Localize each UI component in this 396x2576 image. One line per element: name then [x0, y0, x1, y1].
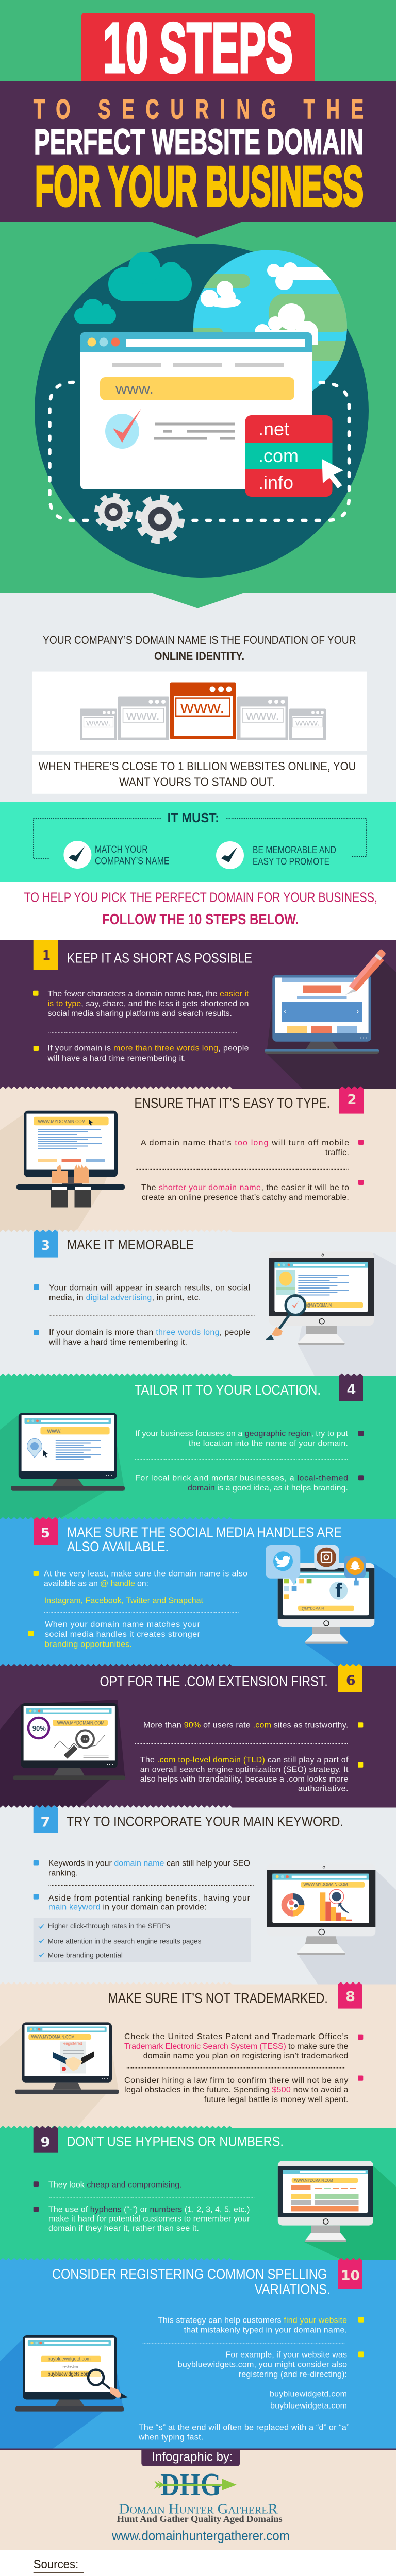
icon: twitter — [266, 1545, 300, 1586]
bullet 2 text: branding opportunities. — [45, 1640, 132, 1649]
call to action — [0, 882, 396, 940]
illustration: desktop with web page — [278, 2161, 373, 2242]
step number 3: 3 — [41, 1238, 50, 1253]
step number 4 — [339, 1374, 363, 1401]
hero pointer — [153, 593, 243, 608]
illustration: monitor with typing hands: WWW.MYDOMAIN.COM — [38, 1118, 86, 1125]
heading: ALSO AVAILABLE. — [67, 1539, 169, 1554]
illustration: desktop with analytics: WWW.MYDOMAIN.COM — [303, 1882, 348, 1888]
requirement: match name: MATCH YOUR — [95, 844, 147, 855]
panel: step 9 — [0, 2126, 396, 2261]
bullet 1 text — [34, 1284, 250, 1302]
bullet 2 text — [34, 1894, 251, 1912]
bullet 1 text: Instagram, Facebook, Twitter and Snapchat — [44, 1597, 204, 1605]
illustration: monitor with seo chart: WWW.MYDOMAIN.COM — [57, 1720, 104, 1726]
icon: earth — [193, 250, 347, 391]
illustration shadow — [298, 1253, 396, 1376]
icon: medium grey window left: www. — [126, 708, 160, 723]
illustration: monitor with magnifier — [15, 2335, 128, 2412]
it must section — [0, 802, 396, 882]
heading: TRY TO INCORPORATE YOUR MAIN KEYWORD. — [67, 1814, 343, 1829]
browser window: www. — [115, 381, 154, 397]
step number 10: 10 — [341, 2268, 360, 2284]
panel: step 3 — [0, 1229, 396, 1376]
icon: orange window: www. — [180, 698, 225, 717]
infographic by tab — [141, 2450, 240, 2466]
intro section — [0, 593, 396, 802]
bullet 2 text: will have a hard time remembering it. — [48, 1338, 187, 1347]
intro text: foundation — [43, 634, 356, 663]
illustration: desktop with social icons: @MYDOMAIN — [302, 1606, 324, 1611]
requirement: memorable — [216, 841, 336, 869]
panel: browser windows — [32, 672, 367, 751]
panel: benefits list: More attention in the search engine results pages — [48, 1937, 201, 1945]
step number 8 — [338, 1982, 362, 2009]
divider — [143, 2343, 345, 2344]
heading — [52, 2266, 331, 2297]
bullet 2 text: The shorter your domain name, the easier it will be to — [141, 1183, 349, 1192]
bullet 1 text: that mistakenly typed in your domain name. — [184, 2326, 347, 2335]
bullet 2 text: main keyword in your domain can provide: — [48, 1903, 207, 1912]
illustration: desktop with analytics — [267, 1863, 375, 1955]
panel: benefits list — [34, 1918, 251, 1962]
bullet 1 text: More than 90% of users rate .com sites as trustworthy. — [143, 1721, 348, 1730]
step number 1: 1 — [42, 948, 51, 963]
panel: step 7 — [0, 1805, 396, 1985]
illustration: monitor with magnifier: buybluewidgets.com — [48, 2371, 90, 2377]
panel: benefits list: Higher click-through rates in the SERPs — [48, 1922, 170, 1930]
bullet 1 text — [141, 1139, 364, 1157]
bullet 1 text — [124, 2032, 363, 2060]
company name: Domain Hunter GathereR — [119, 2501, 278, 2516]
bullet 1 text: A domain name that’s too long will turn off mobile — [141, 1139, 349, 1147]
bullet 1 text: Your domain will appear in search results, on social — [49, 1284, 250, 1292]
divider — [127, 2067, 345, 2069]
step number 5 — [34, 1517, 58, 1545]
logo: dhg: DHG — [160, 2467, 221, 2502]
step number 5: 5 — [41, 1526, 50, 1541]
bullet 1 text: domain name you plan on registering isn’t trademarked — [143, 2052, 348, 2060]
icon: cursor — [322, 459, 343, 488]
illustration: monitor with seo chart: SEO — [82, 1738, 89, 1741]
illustration: monitor with location pin: www. — [47, 1427, 62, 1434]
bullet 1 text: media, in digital advertising, in print, etc. — [49, 1294, 201, 1302]
icon: medium grey window left — [118, 697, 169, 740]
illustration: monitor with seo chart — [13, 1703, 125, 1780]
illustration shadow — [299, 1870, 396, 1985]
bullet 2 text: authoritative. — [298, 1784, 348, 1793]
bullet 2 text — [34, 1044, 249, 1063]
step number 3 — [34, 1229, 58, 1258]
bullet 2 text — [34, 2205, 250, 2233]
icon: small grey window left — [80, 709, 117, 740]
bullet 1 text: If your business focuses on a geographic region, try to put — [135, 1429, 349, 1438]
heading: MAKE IT MEMORABLE — [67, 1237, 194, 1252]
bullet 2 text: legal obstacles in the future. Spending $500 now to avoid a — [124, 2086, 348, 2094]
heading: VARIATIONS. — [255, 2282, 331, 2297]
illustration: monitor and pencil: › — [357, 1008, 359, 1015]
divider — [50, 1315, 255, 1316]
bullet 1 text — [33, 990, 249, 1018]
bullet 1 text: They look cheap and compromising. — [48, 2180, 182, 2190]
illustration: desktop with magnifier: @MYDOMAIN — [307, 1303, 332, 1308]
icon: small grey window left: www. — [86, 718, 110, 728]
bullet 1 text: The fewer characters a domain name has, the easier it — [47, 990, 249, 998]
bullet 1 text: Keywords in your domain name can still help your SEO — [48, 1859, 250, 1868]
illustration shadow — [0, 2027, 119, 2128]
illustration shadow — [0, 1700, 125, 1808]
bullet 2 text: If your domain is more than three words long, people — [49, 1328, 250, 1337]
bullet 2 text: If your domain is more than three words long, people — [47, 1044, 249, 1053]
illustration shadow — [267, 961, 396, 1089]
step number 6: 6 — [346, 1673, 356, 1689]
bullet 1 text — [34, 1859, 250, 1878]
bullet 1 text: the location into the name of your domain. — [189, 1439, 348, 1448]
illustration shadow — [0, 1415, 125, 1520]
step number 1 — [34, 940, 58, 970]
bullet 2 text — [28, 1620, 201, 1649]
bullet 2 text — [34, 1328, 250, 1347]
heading: CONSIDER REGISTERING COMMON SPELLING — [52, 2266, 327, 2282]
step number 4: 4 — [346, 1382, 356, 1398]
bullet 2 text: buybluewidgeta.com — [270, 2402, 347, 2411]
bullet 1 text: ranking. — [48, 1869, 78, 1878]
heading: it must: IT MUST: — [168, 810, 219, 825]
illustration shadow — [305, 1564, 396, 1666]
bullet 2 text — [124, 2075, 363, 2104]
panel: step 2 — [0, 1086, 396, 1232]
heading: MAKE SURE IT’S NOT TRADEMARKED. — [108, 1991, 328, 2006]
company name — [117, 2501, 283, 2524]
bullet 2 text: domain if they hear it, rather than see it. — [48, 2224, 199, 2233]
divider — [136, 1169, 349, 1170]
requirement: memorable: BE MEMORABLE AND — [253, 845, 336, 856]
step number 9 — [34, 2126, 58, 2153]
dotted frame — [34, 818, 367, 859]
icon: large gear — [138, 498, 182, 541]
panel: one billion websites — [32, 755, 367, 794]
divider — [48, 1032, 237, 1033]
domain extensions menu — [245, 415, 332, 497]
panel: step 6 — [0, 1664, 396, 1808]
bullet 1 text: social media sharing platforms and search results. — [47, 1009, 232, 1018]
icon: medium grey window right: www. — [245, 708, 279, 723]
bullet 1 text: Trademark Electronic Search System (TESS) to make sure the — [124, 2042, 348, 2051]
icon: small grey window right — [289, 709, 326, 740]
panel: step 4 — [0, 1374, 396, 1520]
intro text: foundation: YOUR COMPANY’S DOMAIN NAME IS THE FOUNDATION OF YOUR — [43, 634, 356, 647]
step number 6 — [338, 1664, 362, 1692]
heading: KEEP IT AS SHORT AS POSSIBLE — [67, 951, 252, 966]
illustration: desktop with social icons: f — [335, 1580, 342, 1602]
divider — [135, 1459, 348, 1460]
divider — [50, 2197, 254, 2198]
globe illustration — [35, 244, 369, 578]
title banner: TO SECURING THE — [34, 94, 364, 125]
icon: medium grey window right — [237, 697, 288, 740]
sources section — [0, 2550, 396, 2576]
hero section — [0, 0, 396, 593]
illustration: desktop with magnifier — [266, 1252, 374, 1345]
domain extensions menu: .net — [258, 418, 289, 439]
icon: orange window — [170, 682, 236, 739]
bullet 2 text: future legal battle is money well spent. — [204, 2095, 348, 2104]
bullet 2 text: The “s” at the end will often be replaced with a “d” or “a” — [139, 2424, 349, 2432]
step number 8: 8 — [345, 1989, 355, 2005]
bullet 2 text: buybluewidgetd.com — [270, 2390, 347, 2399]
bullet 2 text: When your domain name matches your — [45, 1620, 201, 1629]
requirement: match name — [63, 841, 170, 869]
bullet 1 text — [135, 1429, 364, 1448]
bullet 2 text: Aside from potential ranking benefits, having your — [48, 1894, 251, 1903]
step number 10 — [338, 2258, 362, 2289]
heading: OPT FOR THE .COM EXTENSION FIRST. — [100, 1673, 328, 1689]
call to action: FOLLOW THE 10 STEPS BELOW. — [102, 911, 299, 928]
step number 9: 9 — [40, 2135, 51, 2150]
illustration: monitor and pencil — [265, 950, 386, 1054]
step number 7 — [34, 1805, 58, 1833]
panel: step 1 — [0, 940, 396, 1089]
icon: instagram — [314, 1545, 344, 1570]
title banner — [0, 81, 396, 238]
bullet 2 text: The use of hyphens (“-“) or numbers (1, 2, 3, 4, 5, etc.) — [48, 2205, 250, 2214]
bullet 2 text: buybluewidgets.com, you might consider also — [178, 2361, 347, 2369]
heading — [67, 1524, 342, 1554]
illustration: monitor with handshake: WWW.MYDOMAIN.COM — [31, 2035, 75, 2040]
illustration: monitor with handshake — [15, 2022, 119, 2094]
infographic by tab: Infographic by: — [152, 2450, 233, 2464]
company name: Hunt And Gather Quality Aged Domains — [117, 2514, 283, 2524]
panel: one billion websites: WANT YOURS TO STAND OUT. — [119, 775, 275, 788]
illustration: monitor with handshake: Registered — [63, 2041, 82, 2046]
step number 2: 2 — [348, 1092, 357, 1108]
icon: teal clouds — [74, 252, 192, 324]
bullet 2 text: Consider hiring a law firm to confirm there will not be any — [124, 2076, 348, 2085]
bullet 1 text: traffic. — [325, 1148, 349, 1157]
illustration: monitor with location pin — [11, 1413, 125, 1491]
bullet 2 text: registering (and re-directing): — [239, 2370, 347, 2379]
domain extensions menu: .com — [258, 445, 299, 466]
panel: step 10 — [0, 2258, 396, 2448]
bullet 2 text — [141, 1180, 364, 1202]
bullet 2 text: domain is a good idea, as it helps branding. — [188, 1484, 348, 1493]
icon: small grey window right: www. — [295, 718, 320, 728]
illustration: desktop with social icons — [266, 1545, 374, 1644]
divider — [135, 1743, 348, 1744]
bullet 2 text: also helps with brandability, because a .com looks more — [140, 1775, 348, 1784]
bullet 1 text: At the very least, make sure the domain name is also — [44, 1569, 248, 1578]
icon: small gear — [97, 496, 130, 529]
browser window — [80, 332, 312, 489]
bullet 2 text: an overall search engine optimization (SEO) strategy. It — [140, 1766, 349, 1774]
domain extensions menu: .info — [258, 472, 293, 493]
heading: DON’T USE HYPHENS OR NUMBERS. — [67, 2134, 284, 2149]
bullet 2 text: when typing fast. — [138, 2433, 203, 2442]
bullet 2 text — [135, 1474, 364, 1493]
panel: step 8 — [0, 1982, 396, 2128]
illustration shadow — [0, 1114, 118, 1232]
illustration: monitor with magnifier: re-directing — [63, 2365, 78, 2368]
credits section — [0, 2448, 396, 2550]
illustration shadow — [304, 2166, 396, 2261]
bullet 1 text — [158, 2316, 364, 2335]
bullet 2 text: The .com top-level domain (TLD) can still play a part of — [140, 1756, 349, 1765]
dashed outline — [50, 382, 349, 520]
divider — [44, 1612, 239, 1613]
bullet 1 text: This strategy can help customers find your website — [158, 2316, 347, 2325]
bullet 1 text: available as an @ handle on: — [44, 1580, 148, 1588]
illustration shadow — [0, 2339, 124, 2448]
illustration: desktop with web page: WWW.MYDOMAIN.COM — [294, 2178, 333, 2183]
divider — [48, 1885, 254, 1886]
bullet 2 text — [138, 2350, 364, 2442]
heading: MAKE SURE THE SOCIAL MEDIA HANDLES ARE — [67, 1524, 342, 1540]
bullet 2 text: social media handles it creates stronger — [45, 1630, 201, 1639]
bullet 2 text — [140, 1756, 363, 1793]
panel: one billion websites: WHEN THERE’S CLOSE TO 1 BILLION WEBSITES ONLINE, YOU — [38, 759, 356, 773]
step number 7: 7 — [40, 1815, 51, 1830]
illustration: monitor with typing hands — [16, 1111, 125, 1208]
bullet 2 text: make it hard for potential customers to remember your — [48, 2215, 250, 2224]
heading: ENSURE THAT IT’S EASY TO TYPE. — [134, 1095, 330, 1111]
bullet 1 text: Check the United States Patent and Trademark Office’s — [124, 2032, 348, 2041]
illustration: monitor and pencil: ‹ — [284, 1008, 286, 1015]
title badge: 10 steps — [81, 9, 315, 88]
bullet 2 text: For example, if your website was — [225, 2350, 347, 2359]
illustration: monitor with magnifier: buybluewidgetd.com — [48, 2356, 91, 2362]
step number 2 — [339, 1086, 364, 1114]
requirement: match name: COMPANY’S NAME — [95, 856, 170, 867]
website url: www.domainhuntergatherer.com — [111, 2528, 290, 2544]
sources heading: Sources: — [34, 2557, 78, 2571]
panel: benefits list: More branding potential — [48, 1951, 123, 1959]
heading: TAILOR IT TO YOUR LOCATION. — [134, 1382, 321, 1398]
requirement: memorable: EASY TO PROMOTE — [253, 857, 329, 868]
intro text: foundation: ONLINE IDENTITY. — [154, 650, 244, 663]
bullet 1 text — [34, 1569, 248, 1605]
bullet 2 text: will have a hard time remembering it. — [47, 1054, 186, 1063]
panel: step 5 — [0, 1517, 396, 1666]
bullet 1 text: is to type, say, share, and the less it gets shortened on — [47, 999, 249, 1008]
bullet 2 text: For local brick and mortar businesses, a local-themed — [135, 1474, 348, 1483]
illustration: monitor with seo chart: 90% — [32, 1724, 46, 1732]
bullet 2 text: create an online presence that’s catchy and memorable. — [142, 1193, 349, 1202]
icon: snapchat — [344, 1556, 366, 1581]
